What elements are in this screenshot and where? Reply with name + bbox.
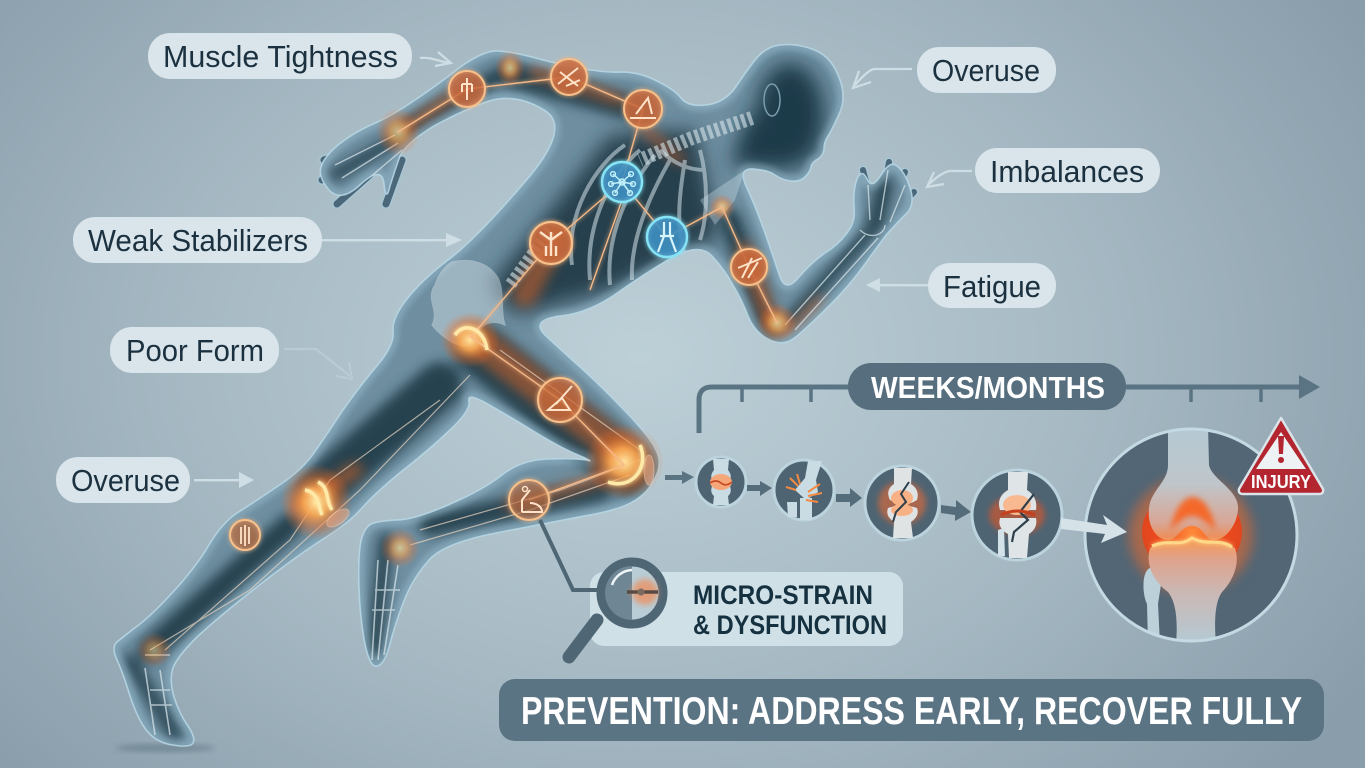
stage 4 joint bbox=[972, 470, 1062, 560]
knee highlight: hip bbox=[455, 328, 487, 350]
arrow: Overuse top bbox=[853, 69, 912, 88]
arrow: Muscle Tightness bbox=[420, 52, 451, 66]
icon: blue knee node bbox=[647, 217, 687, 257]
fingers fill bbox=[322, 140, 914, 210]
label: Overuse top: Overuse bbox=[932, 53, 1040, 88]
injury warning sign bbox=[1239, 418, 1323, 494]
arrow: Poor Form bbox=[284, 349, 352, 379]
stage 2 joint bbox=[774, 460, 834, 520]
label: Muscle Tightness: Muscle Tightness bbox=[163, 39, 398, 74]
prevention banner bbox=[499, 679, 1324, 741]
body edge bbox=[114, 44, 912, 746]
joint line glow bbox=[1152, 538, 1232, 547]
leg fibres bbox=[150, 350, 640, 650]
label: Fatigue: Fatigue bbox=[943, 269, 1041, 304]
patella: front bbox=[644, 455, 654, 485]
icon: upper arm node bbox=[731, 249, 767, 285]
stage arrow 1 bbox=[747, 481, 772, 496]
femur inner fire bbox=[1170, 497, 1216, 530]
icon: elbow node bbox=[551, 59, 587, 95]
label: Poor Form: Poor Form bbox=[126, 333, 264, 368]
arrow: Weak Stabilizers bbox=[322, 233, 462, 247]
timeline ticks bbox=[742, 387, 1261, 402]
joint glows bbox=[136, 50, 797, 668]
icon: shoulder node bbox=[624, 90, 662, 128]
stage arrow 4 bbox=[1061, 515, 1127, 543]
icon: shin node bbox=[230, 520, 260, 550]
skeleton: shoulder bbox=[700, 170, 745, 225]
tibia bbox=[1149, 540, 1237, 644]
skeleton: spine bbox=[510, 118, 752, 285]
arrow: Imbalances bbox=[927, 171, 972, 187]
timeline bbox=[699, 363, 1320, 433]
label: Overuse left bbox=[56, 457, 190, 503]
warning mark bbox=[1278, 436, 1284, 463]
stage arrow 3 bbox=[941, 500, 971, 521]
foot bones bbox=[145, 560, 400, 735]
callout text: & DYSFUNCTION bbox=[693, 610, 887, 640]
label: Imbalances bbox=[975, 148, 1160, 193]
icon: forearm node bbox=[449, 71, 485, 107]
timeline arrowhead bbox=[1299, 375, 1320, 399]
label: Overuse top bbox=[917, 47, 1056, 93]
arrow: Fatigue bbox=[866, 278, 928, 292]
callout text bbox=[693, 580, 887, 640]
stage arrow 0 bbox=[665, 471, 694, 484]
micro-strain callout bbox=[540, 520, 903, 657]
connector network bbox=[398, 77, 777, 500]
label: Fatigue bbox=[928, 263, 1056, 308]
ear bbox=[764, 84, 780, 116]
callout leader bbox=[540, 520, 600, 590]
fibula bbox=[1143, 568, 1161, 634]
timeline axis bbox=[699, 387, 1302, 433]
final injury knee bbox=[1085, 426, 1297, 644]
label: Muscle Tightness bbox=[148, 33, 412, 79]
body silhouette bbox=[114, 44, 912, 746]
magnifier icon bbox=[569, 562, 663, 657]
timeline pill bbox=[848, 363, 1126, 410]
callout text: MICRO-STRAIN bbox=[693, 580, 873, 610]
head shading bbox=[730, 63, 824, 170]
injury text: INJURY bbox=[1251, 472, 1311, 492]
icon: thigh node bbox=[538, 378, 582, 422]
inflammation bbox=[1129, 477, 1253, 593]
label: Imbalances: Imbalances bbox=[990, 154, 1144, 189]
label: Overuse left: Overuse bbox=[71, 463, 180, 498]
fingers outline bbox=[322, 140, 914, 210]
arrow: Overuse left bbox=[194, 472, 254, 488]
knee highlight: rear bbox=[305, 482, 332, 515]
stage 3 joint bbox=[865, 466, 939, 540]
orange muscle tint bbox=[300, 72, 820, 505]
icon: abdomen node bbox=[530, 222, 572, 264]
icon nodes bbox=[230, 59, 767, 550]
callout box bbox=[590, 572, 903, 646]
dark inner tissue bbox=[114, 44, 912, 746]
stage 1 joint bbox=[696, 457, 746, 507]
runner figure bbox=[114, 44, 914, 752]
knee highlight: front bbox=[608, 445, 643, 484]
femur bbox=[1149, 426, 1238, 540]
patella: rear bbox=[324, 506, 352, 530]
stage arrow 2 bbox=[836, 488, 862, 507]
icon: calf node bbox=[509, 480, 549, 520]
label: Weak Stabilizers: Weak Stabilizers bbox=[88, 223, 308, 258]
skeleton: pelvis bbox=[431, 261, 505, 346]
skeleton: ribs bbox=[571, 145, 706, 285]
knee disc bbox=[1085, 429, 1297, 641]
timeline pill: WEEKS/MONTHS bbox=[871, 370, 1105, 405]
knee ring bbox=[1085, 429, 1297, 641]
floor shadow bbox=[115, 744, 215, 752]
torso shading bbox=[490, 130, 720, 315]
label: Poor Form bbox=[110, 327, 279, 373]
inner rim light bbox=[114, 44, 912, 746]
arm bones bbox=[335, 135, 905, 330]
icon: blue network node bbox=[602, 162, 642, 202]
